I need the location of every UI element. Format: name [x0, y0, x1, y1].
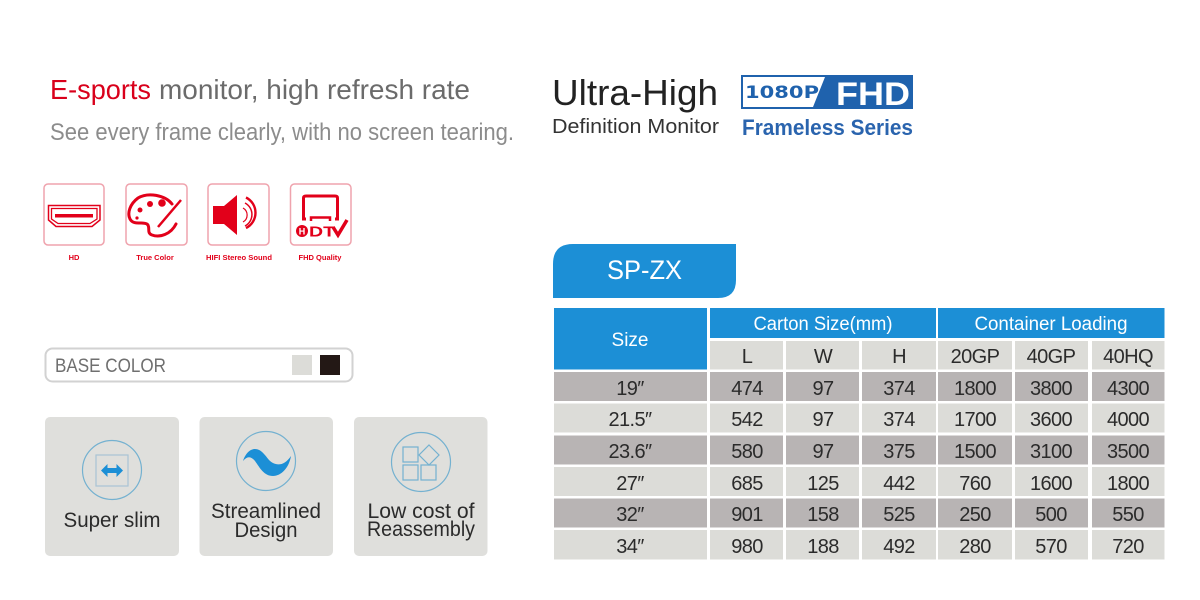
subheading: See every frame clearly, with no screen tearing.: [50, 119, 514, 146]
table row: 34 inch: 34″: [616, 536, 644, 558]
heading: ultra-high definition monitor: Definition Monitor: [552, 115, 719, 138]
feature icon: hifi stereo sound: HIFI Stereo Sound: [206, 253, 272, 262]
table row: 34 inch: 492: [883, 536, 915, 558]
table row: 21.5 inch: 4000: [1107, 409, 1150, 431]
panel: super slim: [45, 417, 179, 556]
table row: 23.6 inch: 580: [731, 441, 763, 463]
table subheader: 40GP: [1027, 346, 1076, 368]
base color bar: BASE COLOR: [55, 356, 166, 377]
table row: 27 inch: 685: [731, 473, 763, 495]
table row: 23.6 inch: 3500: [1107, 441, 1150, 463]
table row: 34 inch: 188: [807, 536, 839, 558]
table header: Container Loading: [974, 314, 1128, 335]
table row: 27 inch: 442: [883, 473, 915, 495]
table row: 34 inch: [554, 530, 1164, 560]
feature icon: FHD quality: FHD Quality: [299, 253, 342, 262]
panel: streamlined design: Streamlined: [211, 500, 321, 523]
table row: 19 inch: [554, 372, 1164, 401]
table header: [554, 308, 1164, 370]
table row: 34 inch: 720: [1112, 536, 1144, 558]
panel: low cost of reassembly: [354, 417, 488, 556]
feature icon: true color: True Color: [136, 253, 174, 262]
heading: ultra-high definition monitor: Ultra-High: [552, 72, 718, 113]
table row: 19 inch: 97: [812, 378, 834, 400]
table row: 19 inch: 3800: [1030, 378, 1073, 400]
table subheader: [710, 341, 1164, 370]
table row: 32 inch: 525: [883, 504, 915, 526]
table row: 27 inch: [554, 467, 1164, 496]
table subheader: 20GP: [951, 346, 1000, 368]
table row: 32 inch: 158: [807, 504, 839, 526]
heading: ultra-high definition monitor: [552, 72, 719, 138]
table row: 21.5 inch: 3600: [1030, 409, 1073, 431]
base color bar: [46, 348, 352, 382]
table row: 23.6 inch: 375: [883, 441, 915, 463]
badge: 1080P FHD: 1080P: [745, 83, 819, 103]
table row: 23.6 inch: 3100: [1030, 441, 1073, 463]
feature icon: true color: [126, 184, 187, 262]
table row: 32 inch: 550: [1112, 504, 1144, 526]
table row: 34 inch: 570: [1035, 536, 1067, 558]
table row: 21.5 inch: 374: [883, 409, 915, 431]
model tab: SP-ZX: [553, 244, 736, 298]
table subheader: L: [742, 346, 753, 368]
feature icon: FHD quality: [290, 184, 351, 262]
label: frameless series: Frameless Series: [742, 115, 913, 140]
table row: 32 inch: 250: [959, 504, 991, 526]
table row: 32 inch: 901: [731, 504, 763, 526]
table row: 23.6 inch: [554, 436, 1164, 464]
model tab: SP-ZX: SP-ZX: [607, 255, 682, 285]
table row: 21.5 inch: 542: [731, 409, 763, 431]
table row: 34 inch: 280: [959, 536, 991, 558]
panel: low cost of reassembly: Low cost of: [368, 500, 475, 523]
feature icon: HD: [44, 184, 104, 262]
badge: 1080P FHD: FHD: [836, 76, 910, 112]
table row: 23.6 inch: 1500: [954, 441, 997, 463]
table row: 32 inch: [554, 498, 1164, 528]
table row: 23.6 inch: 97: [812, 441, 834, 463]
table row: 23.6 inch: 23.6″: [608, 441, 652, 463]
table row: 32 inch: 32″: [616, 504, 644, 526]
table subheader: 40HQ: [1103, 346, 1153, 368]
heading: e-sports monitor: monitor, high refresh rate: [159, 74, 470, 105]
table subheader: W: [814, 346, 833, 368]
table row: 21.5 inch: 1700: [954, 409, 997, 431]
table row: 27 inch: 1600: [1030, 473, 1073, 495]
table header: Size: [612, 330, 648, 351]
table row: 34 inch: 980: [731, 536, 763, 558]
panel: low cost of reassembly: Reassembly: [367, 518, 475, 541]
table row: 27 inch: 125: [807, 473, 839, 495]
table row: 27 inch: 27″: [616, 473, 644, 495]
table row: 19 inch: 4300: [1107, 378, 1150, 400]
table row: 32 inch: 500: [1035, 504, 1067, 526]
feature icon: hifi stereo sound: [206, 184, 272, 262]
table row: 21.5 inch: 21.5″: [608, 409, 652, 431]
panel: super slim: Super slim: [64, 509, 160, 532]
feature icon: FHD quality: H: [299, 226, 305, 236]
table row: 21.5 inch: [554, 404, 1164, 432]
table row: 27 inch: 760: [959, 473, 991, 495]
badge: 1080P FHD: [741, 75, 913, 112]
heading: e-sports monitor: E-sports: [50, 74, 151, 105]
table row: 19 inch: 1800: [954, 378, 997, 400]
table row: 19 inch: 474: [731, 378, 763, 400]
panel: streamlined design: Design: [234, 519, 298, 542]
table row: 21.5 inch: 97: [812, 409, 834, 431]
feature icon: FHD quality: DT: [309, 224, 335, 240]
table subheader: H: [892, 346, 906, 368]
table row: 19 inch: 19″: [616, 378, 644, 400]
table header: Carton Size(mm): [754, 314, 892, 335]
panel: streamlined design: [200, 417, 333, 556]
table row: 27 inch: 1800: [1107, 473, 1150, 495]
table row: 19 inch: 374: [883, 378, 915, 400]
feature icon: HD: HD: [69, 253, 80, 262]
